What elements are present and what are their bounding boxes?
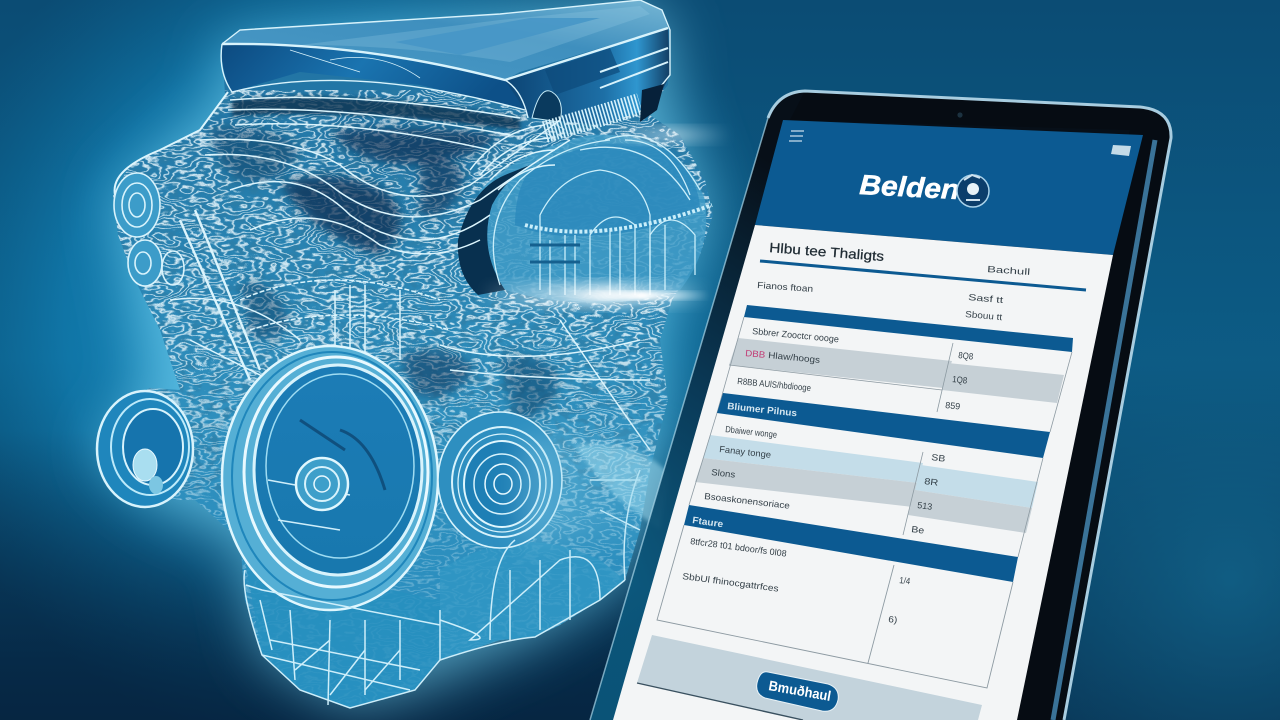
section three row labels: SbbUl fhinocgattrfces xyxy=(682,571,780,594)
tablet body xyxy=(590,91,1171,720)
report meta text xyxy=(757,264,1030,322)
menu icon xyxy=(789,131,804,141)
left pulley xyxy=(97,391,193,507)
tablet rim xyxy=(590,91,1171,720)
logo wordmark: Belden xyxy=(859,169,960,205)
top cover xyxy=(221,0,670,132)
section two row labels: Fanay tonge xyxy=(719,444,772,460)
section two row labels: Dbaiwer wonge xyxy=(725,424,778,440)
right cylinder housing xyxy=(458,135,712,303)
section three bar: Ftaure xyxy=(692,515,724,530)
report heading: Hlbu tee Thaligts xyxy=(769,240,885,264)
screen header xyxy=(755,120,1143,255)
section three bar xyxy=(684,505,1018,582)
glow streak upper xyxy=(600,128,730,142)
heading rule xyxy=(760,261,1086,290)
report meta text: Sasf tt xyxy=(968,292,1004,305)
tablet xyxy=(590,91,1171,720)
screen sheet xyxy=(613,225,1113,720)
report meta text: Bachull xyxy=(987,264,1030,277)
section two row labels: Bsoaskonensoriace xyxy=(704,491,790,511)
flywheel xyxy=(222,346,438,610)
report meta text: Fianos ftoan xyxy=(757,280,813,294)
logo badge xyxy=(957,175,989,207)
window icon xyxy=(1111,145,1131,156)
engine wireframe xyxy=(90,0,720,720)
section one row labels: R8BB AUlS/hbdiooge xyxy=(737,376,811,393)
section one row labels: 8Q8 xyxy=(958,350,974,362)
action button xyxy=(757,672,838,711)
action button: Bmuðhaul xyxy=(767,677,832,704)
wire bundles xyxy=(115,92,650,450)
light band beside tablet xyxy=(520,420,680,540)
section three row labels: 8tfcr28 t01 bdoor/fs 0l08 xyxy=(690,536,787,559)
section two row labels: Be xyxy=(911,524,925,536)
section one row labels: 859 xyxy=(945,400,961,412)
section three row labels: 1/4 xyxy=(899,575,911,586)
section three row labels: 6) xyxy=(888,614,898,625)
section one row labels: 1Q8 xyxy=(952,374,968,386)
report meta text: Sbouu tt xyxy=(965,309,1003,322)
engine body xyxy=(90,0,720,720)
pink code: DBB xyxy=(745,348,766,360)
section two tinted rows xyxy=(695,435,1038,533)
tablet right bezel xyxy=(790,91,1171,720)
glow streak lower xyxy=(480,284,710,306)
section two row labels: Slons xyxy=(711,467,736,480)
camera xyxy=(957,112,963,118)
section one bar xyxy=(744,305,1073,352)
section one row labels: Hlaw/hoogs xyxy=(768,350,821,365)
section one row labels: Sbbrer Zooctcr oooge xyxy=(752,326,839,344)
action panel xyxy=(637,635,982,720)
lower housing and oil pan xyxy=(244,470,640,708)
section two row labels: 513 xyxy=(917,500,933,512)
section three table xyxy=(657,505,1018,688)
section one row labels xyxy=(737,326,974,412)
section two bar xyxy=(717,393,1050,458)
accessory pulleys upper left xyxy=(114,173,184,286)
section three row labels xyxy=(682,536,911,625)
section one table xyxy=(717,305,1073,432)
section two row labels: SB xyxy=(931,452,946,464)
section two bar: Bliumer Pilnus xyxy=(727,401,797,419)
section two row labels: 8R xyxy=(924,476,939,488)
section two table xyxy=(689,393,1050,557)
second pulley xyxy=(438,412,562,548)
engine outer glow xyxy=(97,0,713,708)
section two row labels xyxy=(704,424,946,536)
section one grey rows xyxy=(729,338,1064,403)
